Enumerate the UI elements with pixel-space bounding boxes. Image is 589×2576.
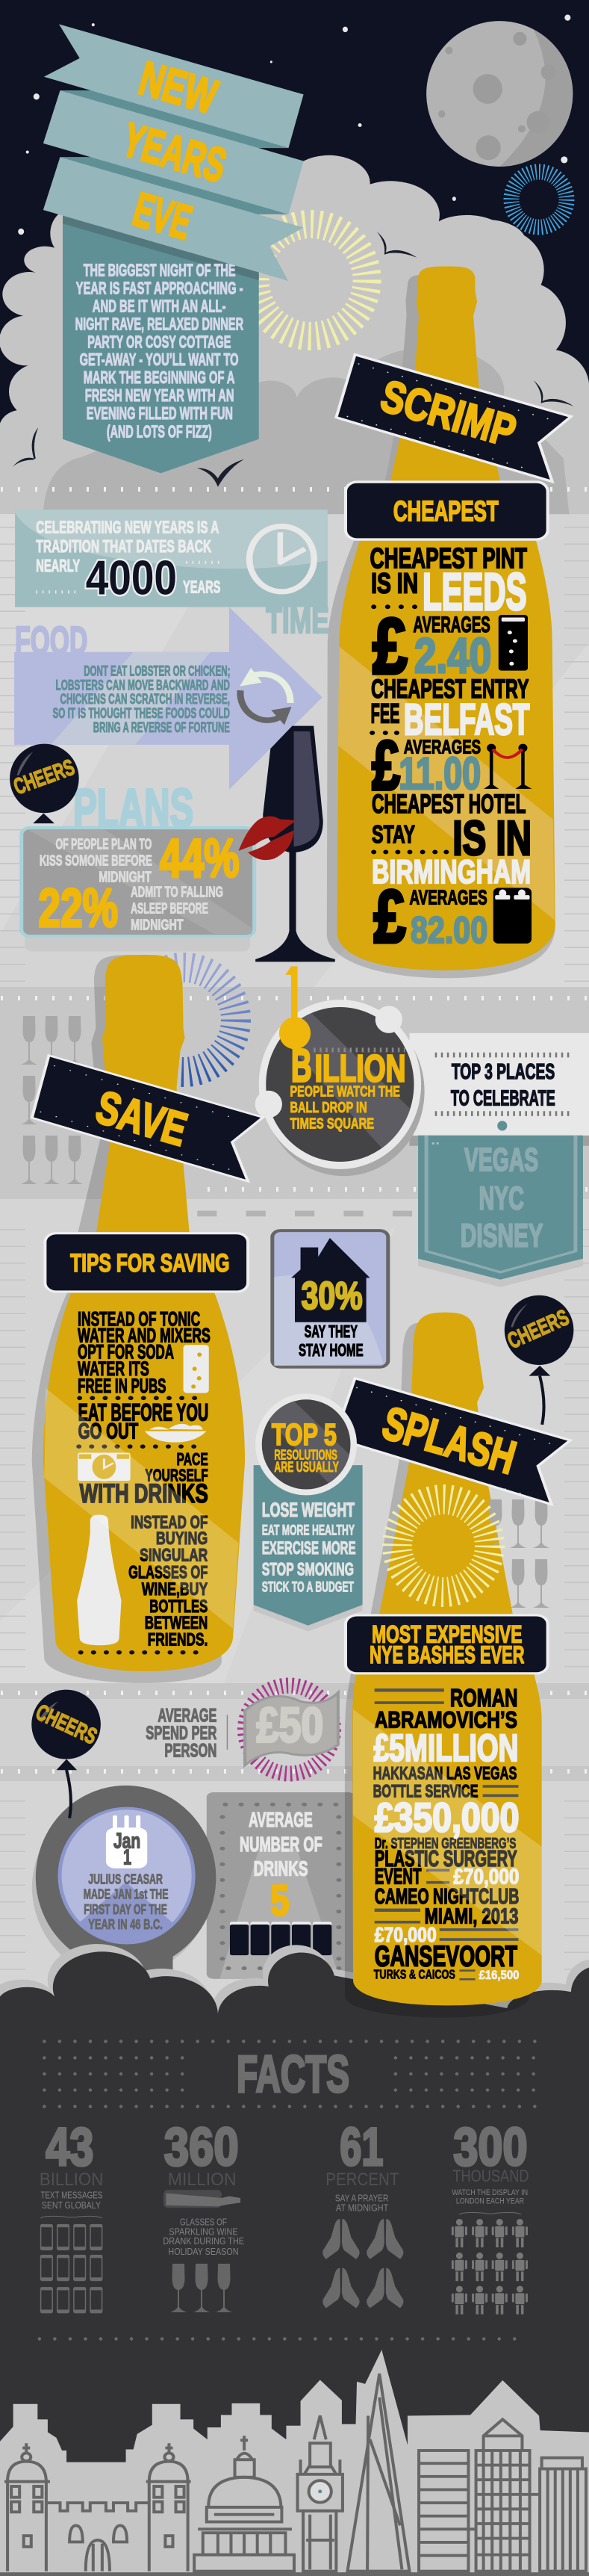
tips text block: WINE,BUY — [142, 1579, 208, 1599]
tips text block: WITH DRINKS — [80, 1479, 208, 1508]
cheapest text block — [370, 542, 532, 959]
dividers second band — [1, 998, 589, 1216]
panel: intro text: GET-AWAY - YOU’LL WANT TO — [80, 350, 239, 370]
dotted divider — [1, 487, 589, 492]
fact: 61 percent: SAY A PRAYER — [335, 2193, 388, 2203]
tips text block: INSTEAD OF TONIC — [78, 1309, 200, 1331]
expensive bashes list: EVENT — [375, 1863, 422, 1889]
heading: time: TIME — [266, 601, 329, 641]
tips text block: YOURSELF — [145, 1465, 208, 1485]
fact: 43 billion: SENT GLOBALY — [42, 2199, 101, 2211]
cheapest text block: IS IN — [452, 811, 532, 865]
panel: plans: 44% — [160, 828, 240, 888]
cheapest text block: AVERAGES — [404, 737, 481, 758]
ball drop: B — [291, 1039, 312, 1092]
balloon: cheers 1 — [10, 744, 79, 823]
moon — [426, 21, 573, 167]
average spend: £50 — [257, 1697, 323, 1753]
tips label — [45, 1233, 248, 1292]
expensive bashes list: £70,000 — [375, 1924, 437, 1947]
fact: 43 billion: 43 — [46, 2117, 93, 2177]
blue firework — [511, 172, 567, 227]
tips text block: BUYING — [156, 1528, 208, 1548]
panel: 30 percent stay home — [272, 1230, 388, 1367]
skyline backdrop — [0, 2350, 589, 2576]
panel: plans: KISS SOMONE BEFORE — [40, 851, 152, 869]
tips text block: WATER ITS — [78, 1358, 149, 1380]
panel: intro text: (AND LOTS OF FIZZ) — [107, 422, 212, 442]
panel: top 5 resolutions: STICK TO A BUDGET — [262, 1579, 354, 1595]
average spend: PERSON — [164, 1741, 216, 1762]
side ticks — [13, 527, 577, 2017]
panel: 30 percent stay home: SAY THEY — [305, 1322, 358, 1341]
fact: 61 percent: PERCENT — [325, 2170, 399, 2190]
panel: food arrow — [14, 607, 322, 790]
panel: plans: ADMIT TO FALLING — [131, 883, 223, 900]
scrimp bottle neck — [381, 266, 503, 495]
average spend: AVERAGE — [158, 1706, 216, 1726]
heading: plans: PLANS — [73, 778, 193, 838]
birds — [13, 232, 573, 487]
cheapest text block: £ — [374, 876, 405, 959]
panel: intro text: YEAR IS FAST APPROACHING - — [76, 279, 243, 298]
title ribbon: NEW — [134, 51, 223, 124]
balloon: cheers 3: CHEERS — [32, 1700, 101, 1750]
splash bottle — [370, 1313, 514, 1618]
icon: three flutes — [170, 2264, 232, 2312]
icon: lips — [239, 816, 296, 860]
title ribbon: EVE — [128, 182, 198, 250]
expensive bashes list — [353, 1683, 542, 1982]
tips text block: GLASSES OF — [128, 1562, 208, 1582]
panel: intro text: MARK THE BEGINNING OF A — [84, 368, 234, 388]
panel: 30 percent stay home: STAY HOME — [299, 1340, 364, 1360]
icon: food bowl — [145, 1424, 207, 1443]
panel: average number of drinks: DRINKS — [254, 1858, 308, 1880]
cheapest text block: STAY — [372, 820, 415, 849]
panel: top 5 resolutions — [254, 1393, 363, 1632]
panel: time: YEARS — [183, 577, 220, 597]
panel: intro text: EVENING FILLED WITH FUN — [87, 404, 233, 424]
fact: 300 thousand — [452, 2117, 529, 2315]
cheapest label: CHEAPEST — [393, 495, 499, 527]
panel: food arrow: CHICKENS CAN SCRATCH IN REVERSE, — [60, 691, 230, 708]
fact: 43 billion — [40, 2117, 103, 2313]
panel: plans: OF PEOPLE PLAN TO — [55, 835, 152, 852]
icon: reverse arrows — [240, 668, 291, 725]
tips text block: INSTEAD OF — [131, 1511, 208, 1532]
tips text block: FRIENDS. — [148, 1629, 208, 1650]
fact: 43 billion: TEXT MESSAGES — [40, 2190, 103, 2200]
ball drop: ILLION — [315, 1047, 405, 1089]
dark clouds — [0, 1944, 589, 2052]
pennant: vegas nyc disney: NYC — [479, 1180, 524, 1216]
panel: plans: MIDNIGHT — [99, 867, 152, 885]
fact: 61 percent: 61 — [340, 2117, 383, 2177]
glasses right — [487, 1499, 549, 1608]
panel: intro text: THE BIGGEST NIGHT OF THE — [84, 261, 236, 280]
medallion: julius ceasar: MADE JAN 1st THE — [84, 1886, 168, 1902]
expensive bashes list: BOTTLE SERVICE — [373, 1781, 479, 1801]
tips text block: WATER AND MIXERS — [78, 1325, 211, 1347]
cheapest text block: £ — [372, 727, 400, 805]
panel: top 5 resolutions: LOSE WEIGHT — [262, 1499, 355, 1521]
title ribbon: YEARS — [117, 112, 232, 193]
expensive bottle — [345, 1671, 542, 2018]
band: top 3 places — [409, 1033, 589, 1146]
save banner: SAVE — [90, 1081, 193, 1156]
expensive bashes list: £70,000 — [453, 1866, 519, 1889]
tips text block: BOTTLES — [149, 1596, 208, 1616]
tips text block: GO OUT — [78, 1419, 138, 1443]
panel: plans: ASLEEP BEFORE — [131, 899, 208, 917]
magenta firework — [245, 1685, 333, 1774]
expensive label — [346, 1615, 548, 1674]
panel: food arrow: BRING A REVERSE OF FORTUNE — [93, 719, 230, 736]
panel: plans: 22% — [38, 877, 118, 938]
cheapest text block: AVERAGES — [409, 887, 487, 909]
panel: top 5 resolutions: STOP SMOKING — [262, 1559, 354, 1579]
title ribbon — [43, 24, 304, 281]
skyline: modern towers — [0, 2419, 589, 2575]
icon: soda glass — [184, 1345, 209, 1393]
cheapest text block: 82.00 — [411, 909, 487, 951]
yellow firework — [255, 224, 367, 336]
ball drop — [255, 966, 425, 1176]
fact: 300 thousand: 300 — [453, 2117, 527, 2177]
fact: 360 million — [163, 2117, 244, 2257]
splash banner: SPLASH — [377, 1397, 521, 1484]
bottle highlight stripe — [44, 1388, 239, 1629]
save bottle — [32, 955, 245, 1683]
panel: intro text: AND BE IT WITH AN ALL- — [93, 297, 225, 316]
skyline: big ben — [298, 2415, 343, 2572]
text: EAT BEFORE YOU — [78, 1399, 208, 1426]
scrimp banner: SCRIMP — [375, 371, 522, 456]
fact: 360 million: DRANK DURING THE — [163, 2235, 244, 2247]
tips text block: PACE — [177, 1449, 208, 1469]
skyline: tower of london — [4, 2443, 191, 2572]
cheapest bottle — [327, 538, 555, 978]
panel: food arrow: DONT EAT LOBSTER OR CHICKEN; — [84, 663, 230, 679]
panel: plans — [22, 828, 255, 951]
champagne glass — [255, 726, 335, 962]
panel: average number of drinks: NUMBER OF — [240, 1833, 322, 1857]
cheapest text block: 2.40 — [414, 628, 491, 684]
cheapest text block: 11.00 — [399, 749, 481, 799]
cheapest text block: £ — [373, 602, 407, 690]
balloon: cheers 3 — [31, 1690, 101, 1818]
tips label: TIPS FOR SAVING — [70, 1249, 229, 1278]
tips text block: BETWEEN — [145, 1612, 208, 1632]
fact: 360 million: HOLIDAY SEASON — [168, 2246, 239, 2257]
tips text block: OPT FOR SODA — [78, 1342, 174, 1363]
average spend: SPEND PER — [146, 1724, 216, 1744]
balloon: cheers 1: CHEERS — [10, 755, 78, 799]
cheapest label — [346, 482, 548, 539]
panel: plans: MIDNIGHT — [131, 915, 184, 933]
heading: food: FOOD — [15, 619, 87, 663]
fact: 300 thousand: THOUSAND — [452, 2167, 529, 2185]
cheapest text block: IS IN — [371, 567, 418, 599]
panel: time: 4000 — [86, 551, 177, 605]
panel: average number of drinks: AVERAGE — [249, 1809, 313, 1832]
panel: 30 percent stay home: 30% — [302, 1274, 363, 1317]
panel: time: NEARLY — [36, 555, 80, 575]
fact: 43 billion: BILLION — [40, 2170, 103, 2190]
skyline: shard — [347, 2374, 409, 2572]
panel: top 5 resolutions: RESOLUTIONS — [274, 1448, 337, 1463]
panel: intro text: FRESH NEW YEAR WITH AN — [85, 386, 234, 406]
tips text block: SINGULAR — [140, 1545, 208, 1565]
panel: intro text — [63, 214, 259, 473]
clouds behind the bottle — [0, 155, 589, 514]
facts heading: FACTS — [237, 2046, 349, 2104]
panel: top 5 resolutions: EAT MORE HEALTHY — [262, 1522, 355, 1538]
expensive bashes list: £16,500 — [479, 1969, 519, 1982]
fact: 360 million: SPARKLING WINE — [169, 2226, 238, 2237]
panel: intro text: NIGHT RAVE, RELAXED DINNER — [75, 315, 243, 334]
cheapest text block: AVERAGES — [414, 613, 490, 637]
expensive bashes list: TURKS & CAICOS — [374, 1968, 455, 1982]
fact: 300 thousand: LONDON EACH YEAR — [456, 2197, 524, 2205]
splash firework — [397, 1499, 490, 1592]
panel: average number of drinks: 5 — [270, 1877, 289, 1925]
pennant: vegas nyc disney — [418, 1136, 583, 1287]
medallion: julius ceasar: Jan — [113, 1829, 140, 1853]
tips text block: FREE IN PUBS — [78, 1375, 166, 1397]
medallion: julius ceasar: YEAR IN 46 B.C. — [88, 1916, 163, 1932]
panel: top 5 resolutions: ARE USUALLY — [274, 1459, 339, 1476]
expensive bashes list: MIAMI, 2013 — [425, 1905, 518, 1928]
ball drop: TIMES SQUARE — [290, 1115, 374, 1132]
panel: time: CELEBRATIING NEW YEARS IS A — [36, 517, 219, 537]
fact: 360 million: GLASSES OF — [180, 2216, 227, 2227]
panel: time — [15, 510, 328, 607]
icon: clock and drinks — [78, 1452, 131, 1481]
cheapest text block: FEE — [371, 698, 399, 729]
panel: intro text: PARTY OR COSY COTTAGE — [87, 333, 231, 352]
medallion: julius ceasar: JULIUS CEASAR — [88, 1871, 163, 1887]
expensive bashes list: ROMAN — [450, 1683, 517, 1712]
icon: bed — [493, 888, 532, 944]
skyline: st pauls — [194, 2436, 294, 2572]
medallion: julius ceasar: FIRST DAY OF THE — [84, 1901, 167, 1917]
stars — [18, 14, 570, 235]
glasses left — [21, 1016, 83, 1184]
panel: average number of drinks — [207, 1792, 355, 1979]
fact: 61 percent: AT MIDNIGHT — [336, 2202, 388, 2214]
panel: top 5 resolutions: TOP 5 — [272, 1417, 337, 1452]
medallion: julius ceasar — [31, 1786, 216, 1971]
balloon: cheers 2 — [504, 1295, 573, 1425]
fact: 61 percent — [322, 2117, 403, 2308]
band dividers three — [1, 1693, 589, 1771]
tips text block — [78, 1309, 211, 1653]
save banner — [32, 1056, 263, 1181]
fact: 360 million: 360 — [164, 2117, 239, 2177]
medallion: julius ceasar: 1 — [123, 1845, 131, 1869]
icon: white bottle — [77, 1514, 122, 1645]
ball drop: BALL DROP IN — [290, 1100, 367, 1116]
panel: time: TRADITION THAT DATES BACK — [36, 536, 211, 556]
panel: food arrow: LOBSTERS CAN MOVE BACKWARD AND — [55, 677, 230, 693]
fact: 300 thousand: WATCH THE DISPLAY IN — [452, 2188, 528, 2197]
splash banner — [334, 1378, 570, 1505]
panel: top 5 resolutions: EXERCISE MORE — [262, 1538, 356, 1558]
save firework — [131, 967, 236, 1072]
icon: pint glass — [499, 615, 528, 671]
panel: food arrow: SO IT IS THOUGHT THESE FOODS COULD — [52, 705, 230, 722]
ball drop: PEOPLE WATCH THE — [290, 1083, 400, 1100]
average spend — [146, 1693, 338, 1765]
scrimp banner — [336, 355, 571, 482]
fact: 360 million: MILLION — [168, 2170, 237, 2190]
icon: velvet rope — [484, 744, 532, 789]
